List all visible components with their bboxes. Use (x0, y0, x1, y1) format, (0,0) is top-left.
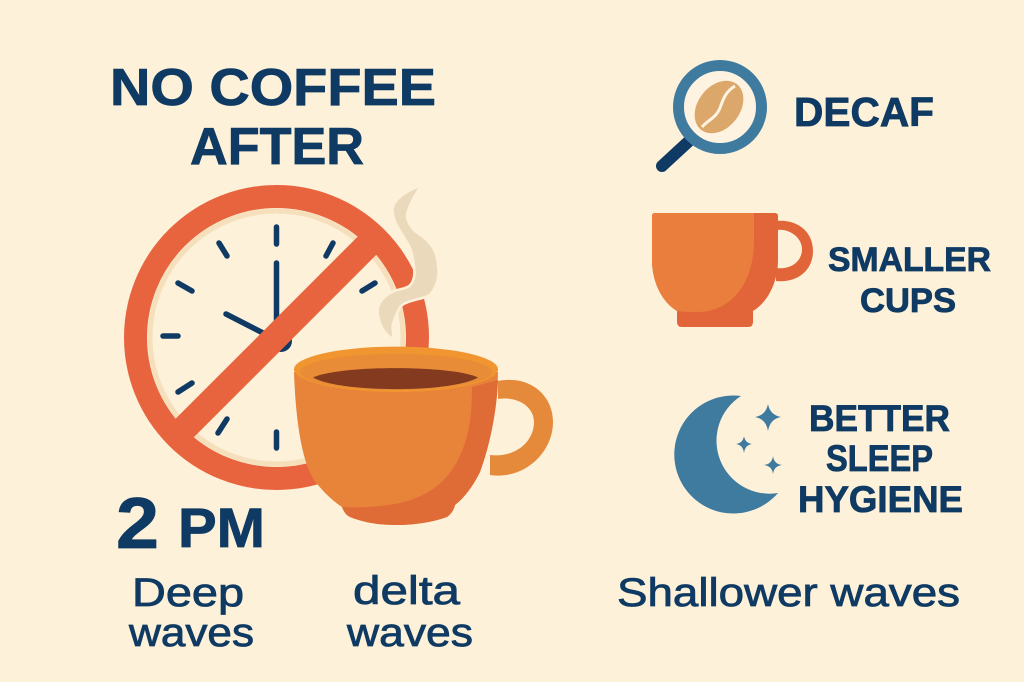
label: delta waves: delta (353, 569, 461, 613)
label: shallower waves: Shallower waves (617, 571, 960, 615)
label: deep waves (128, 571, 254, 655)
label: smaller cups: SMALLER (828, 241, 991, 279)
icon: coffee cup (294, 347, 553, 525)
label: delta waves (346, 569, 473, 655)
label: deep waves: Deep (132, 571, 244, 615)
label: smaller cups: CUPS (860, 282, 956, 320)
label: smaller cups (828, 241, 991, 320)
icon: clock with prohibition sign (136, 196, 418, 478)
title: NO COFFEE (110, 59, 436, 117)
label: better sleep hygiene: BETTER (809, 398, 950, 439)
label: 2 PM: PM (178, 496, 265, 559)
label: deep waves: waves (128, 611, 254, 655)
title: AFTER (190, 118, 364, 176)
label: 2 PM: 2 (116, 484, 159, 564)
label: better sleep hygiene: SLEEP (826, 438, 933, 479)
label: 2 PM (116, 484, 265, 564)
icon: magnifier with coffee bean (662, 66, 762, 166)
label: delta waves: waves (346, 611, 473, 655)
label: better sleep hygiene: HYGIENE (798, 479, 963, 520)
icon: moon and stars (674, 395, 782, 513)
icon: steam (379, 188, 437, 337)
label: decaf: DECAF (794, 89, 934, 135)
label: better sleep hygiene (798, 398, 963, 520)
title (110, 59, 436, 176)
icon: smaller cup (652, 213, 813, 327)
